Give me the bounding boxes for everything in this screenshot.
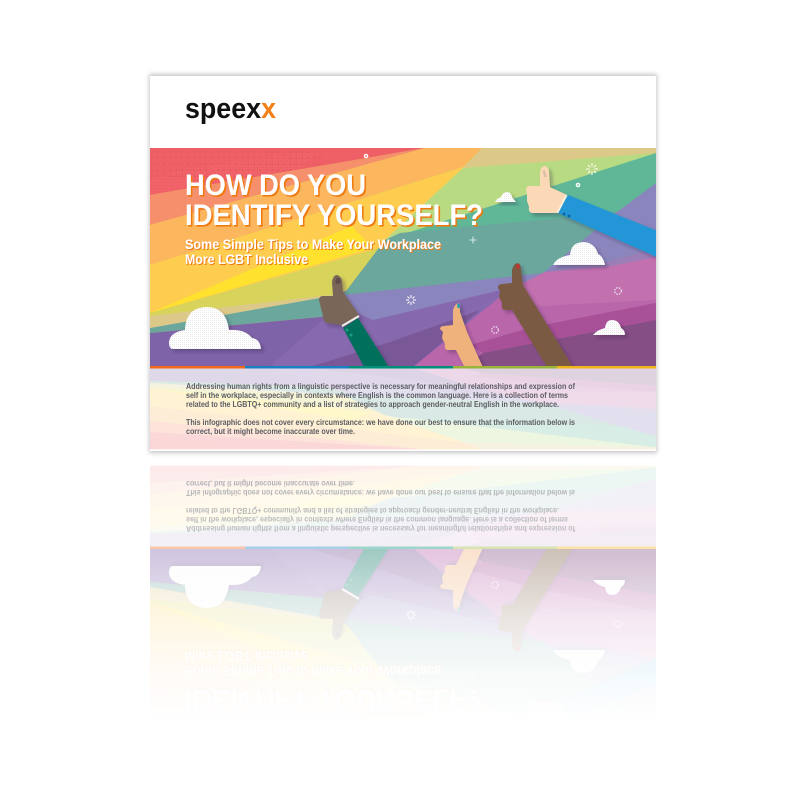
title: HOW DO YOU: [185, 169, 366, 202]
reflection of card: More LGBT Inclusive: [185, 648, 308, 663]
reflection of card: [140, 462, 670, 800]
subtitle: [185, 237, 441, 267]
card artwork: banner and pale panel: [150, 148, 670, 451]
intro text: related to the LGBTQ+ community and a list of strategies to approach gender-neutral English in the workplace.: [186, 399, 559, 409]
pale panel: mirrored rays: [150, 368, 656, 451]
cloud: right small: [593, 320, 625, 335]
card shadow: [149, 74, 657, 453]
cloud: top small: [495, 192, 516, 202]
title: [185, 169, 483, 232]
reflection of card: self in the workplace, especially in contexts where English is the common language. Here is a collection of terms: [186, 515, 568, 525]
cloud: left large: [169, 307, 261, 349]
hand: light thumbs up with blue sleeve: [526, 166, 670, 263]
reflection of card: IDENTIFY YOURSELF?: [185, 683, 483, 716]
intro text: correct, but it might become inaccurate over time.: [186, 426, 355, 436]
decorative sparkle icons: [364, 154, 621, 333]
hand: peach thumbs up: [440, 303, 485, 372]
reflection of card: related to the LGBTQ+ community and a list of strategies to approach gender-neutral English in the workplace.: [186, 506, 559, 516]
logo: speexx: speexx: [185, 93, 276, 125]
intro text: [186, 381, 575, 436]
reflection of card: This infographic does not cover every circumstance: we have done our best to ensure that the information below is: [186, 488, 575, 498]
reflection of card: Some Simple Tips to Make Your Workplace: [185, 663, 441, 678]
banner: rainbow rays: [150, 148, 656, 367]
reflection of card: Addressing human rights from a linguistic perspective is necessary for meaningful relationships and expression of: [186, 524, 575, 534]
cloud: right large: [553, 242, 605, 265]
colour strip: [150, 366, 656, 368]
intro text: self in the workplace, especially in contexts where English is the common language. Here is a collection of terms: [186, 390, 568, 400]
hand: left thumbs up with green sleeve: [319, 275, 392, 372]
title: IDENTIFY YOURSELF?: [185, 199, 483, 232]
hands clipped to banner: [319, 166, 670, 372]
subtitle: More LGBT Inclusive: [185, 252, 308, 267]
reflection of card: correct, but it might become inaccurate over time.: [186, 479, 355, 489]
subtitle: Some Simple Tips to Make Your Workplace: [185, 237, 441, 252]
intro text: This infographic does not cover every circumstance: we have done our best to ensure that the information below is: [186, 417, 575, 427]
hand: dark brown thumbs up: [498, 263, 576, 372]
intro text: Addressing human rights from a linguistic perspective is necessary for meaningful relationships and expression of: [186, 381, 575, 391]
card: [150, 76, 656, 451]
